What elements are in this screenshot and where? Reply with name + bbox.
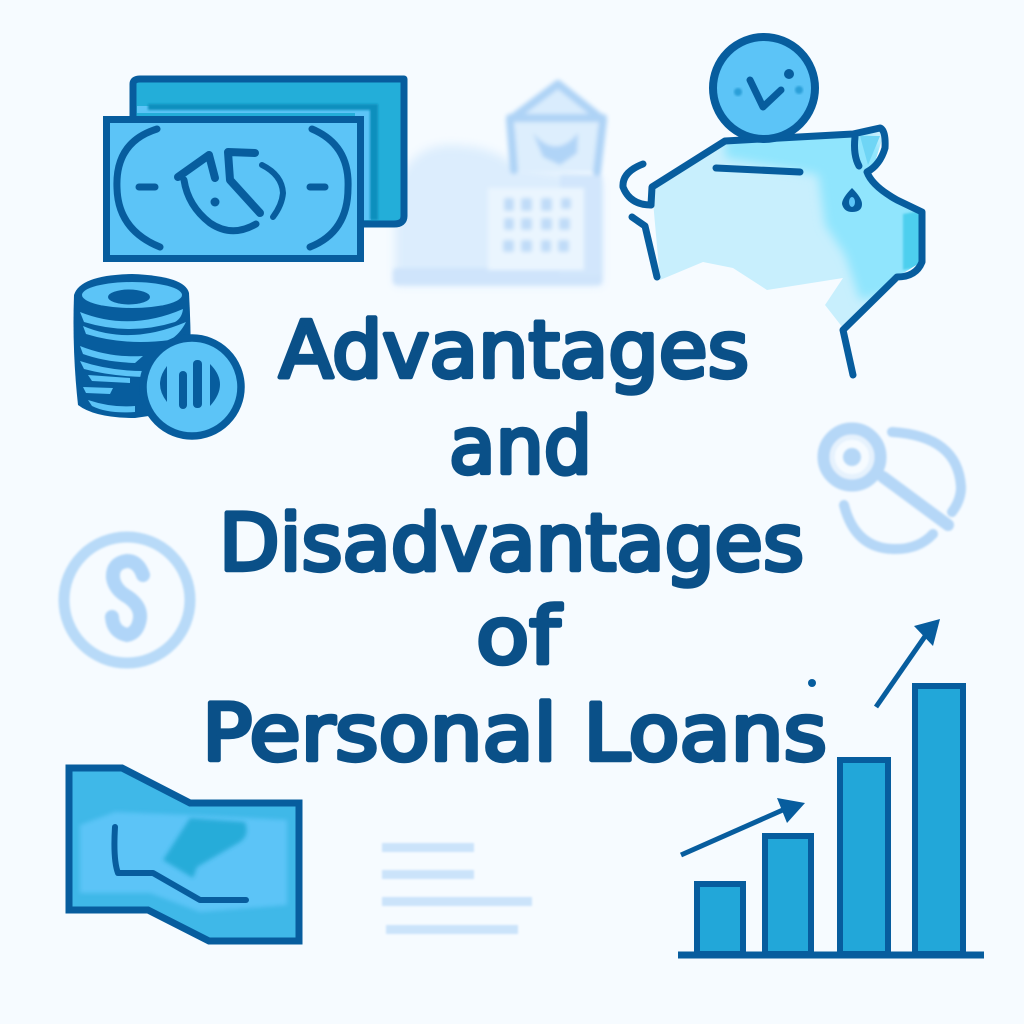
- title: of: [476, 592, 562, 682]
- title: Personal Loans: [202, 689, 827, 779]
- bar chart with arrows: [678, 619, 984, 955]
- faded text lines: [382, 843, 532, 934]
- pig body: [654, 132, 918, 326]
- title: and: [449, 402, 592, 492]
- coin: [713, 37, 815, 139]
- title: [202, 306, 827, 779]
- title: Advantages: [279, 306, 749, 396]
- icon: hand holding cash: [69, 768, 299, 941]
- icon: faded dollar coin: [64, 537, 190, 663]
- icon: coin stack: [74, 274, 241, 436]
- icon: banknotes: [106, 79, 404, 258]
- icon: piggy bank with coin: [623, 37, 930, 375]
- icon: faded bank building: [393, 84, 604, 285]
- back note: [133, 79, 404, 224]
- title: Disadvantages: [219, 499, 804, 589]
- front note: [106, 120, 360, 258]
- icon: faded magnifier dial: [826, 431, 961, 549]
